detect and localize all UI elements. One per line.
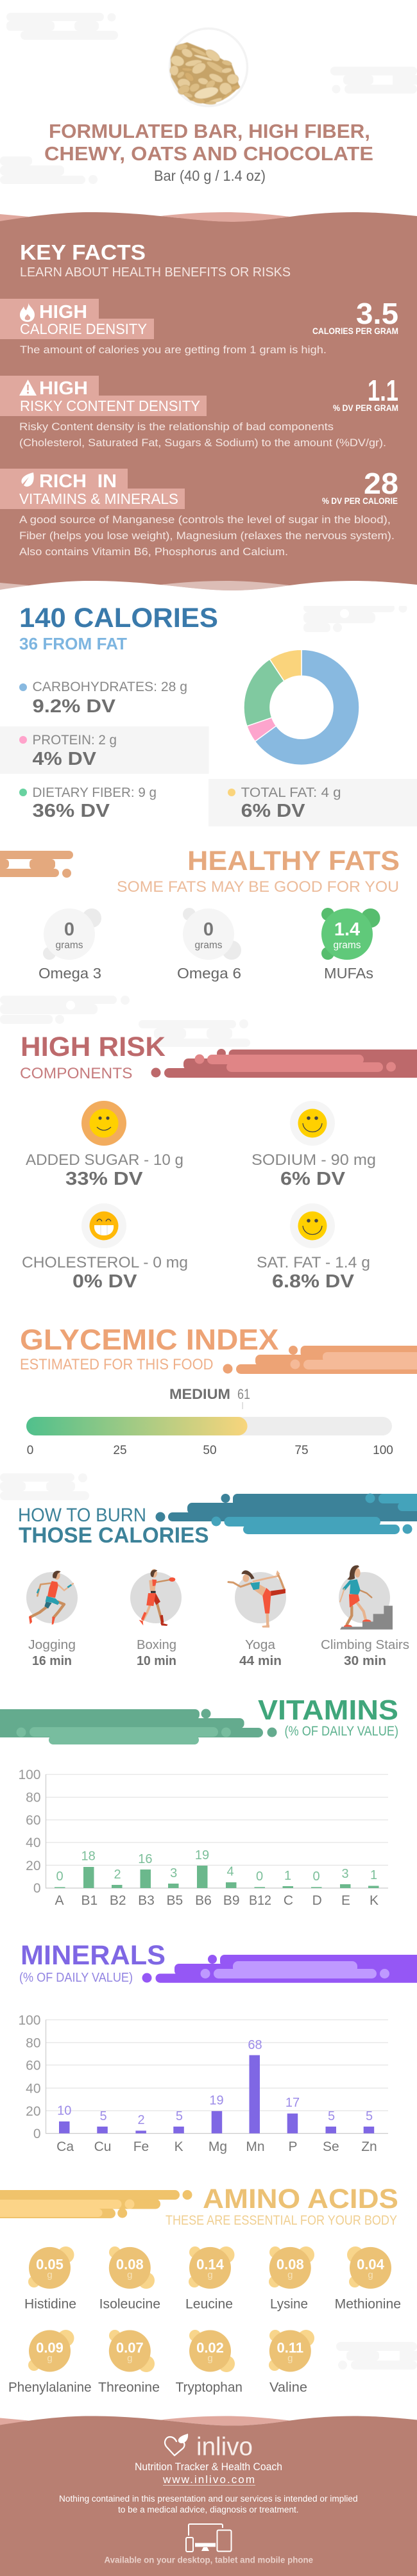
fact: rich in vitamins and minerals	[0, 467, 398, 558]
bar chart: minerals: 10	[57, 2104, 71, 2118]
activity labels: Boxing	[137, 1638, 176, 1652]
bar chart: minerals: P	[288, 2139, 298, 2154]
gauge scale: 100	[373, 1444, 393, 1457]
bar chart: vitamins: 19	[195, 1848, 209, 1862]
bar chart: vitamins: B6	[195, 1893, 212, 1908]
availability note: Available on your desktop, tablet and mobile phone	[104, 2555, 313, 2565]
bar chart: minerals: Fe	[133, 2139, 149, 2154]
bar chart: minerals: Cu	[94, 2139, 111, 2154]
bar chart: vitamins: A	[55, 1893, 64, 1908]
title: CHEWY, OATS AND CHOCOLATE	[44, 142, 373, 165]
bubble: omega 6	[177, 908, 241, 982]
gauge label: 61	[237, 1386, 250, 1402]
bar chart: vitamins: 0	[33, 1881, 41, 1896]
macro: protein: PROTEIN: 2 g	[32, 733, 117, 748]
panel: how to burn those calories	[18, 1494, 417, 1668]
bar chart: vitamins: B9	[223, 1893, 240, 1908]
amino values: 0.07	[116, 2340, 144, 2356]
amino names: Methionine	[335, 2296, 401, 2312]
amino names	[8, 2296, 401, 2395]
gauge scale	[27, 1444, 393, 1457]
activity labels: 16 min	[32, 1654, 72, 1668]
bar chart: vitamins: 18	[81, 1850, 96, 1864]
macro: dietary fiber: 36% DV	[32, 801, 110, 821]
gauge scale: 75	[294, 1444, 309, 1457]
bar chart: minerals: Ca	[56, 2139, 74, 2154]
macro: protein	[19, 733, 117, 769]
bubble: mufas	[321, 908, 380, 982]
bubble: mufas: 1.4	[334, 919, 360, 940]
fact: risky content density: (Cholesterol, Saturated Fat, Sugars & Sodium) to the amount (%DV/gr).	[19, 437, 386, 449]
amino values: 0.11	[277, 2340, 303, 2356]
macro: dietary fiber	[19, 785, 157, 821]
bar chart: minerals: Se	[323, 2139, 339, 2154]
activity labels: 44 min	[239, 1654, 282, 1668]
macro: protein: 4% DV	[32, 749, 97, 769]
panel: footer	[0, 2416, 417, 2576]
panel: high risk components	[20, 1032, 417, 1292]
bar chart: vitamins: 20	[26, 1859, 41, 1873]
fact: risky content density: 1.1	[368, 374, 398, 407]
amino units: g	[207, 2270, 213, 2280]
panel: calories	[0, 603, 417, 826]
icon: leaf	[21, 473, 34, 487]
gauge scale: 0	[27, 1444, 33, 1457]
amino values	[36, 2257, 385, 2356]
fact: rich in vitamins and minerals: A good source of Manganese (controls the level of sugar in the blood),	[19, 514, 391, 526]
subheading: ESTIMATED FOR THIS FOOD	[20, 1356, 213, 1373]
bubble: omega 3	[38, 908, 101, 982]
component: added sugar: 33% DV	[65, 1169, 143, 1189]
component: saturated fat: SAT. FAT - 1.4 g	[257, 1254, 370, 1271]
bar chart: minerals: 0	[33, 2127, 41, 2141]
heading: high risk: HIGH RISK	[21, 1032, 166, 1062]
bar chart: vitamins: 100	[18, 1768, 41, 1782]
activity: climbing stairs	[339, 1565, 393, 1630]
bar chart: vitamins: C	[284, 1893, 293, 1908]
component: added sugar: ADDED SUGAR - 10 g	[26, 1151, 183, 1169]
fact: risky content density	[0, 374, 398, 449]
fact: risky content density: % DV PER GRAM	[333, 403, 398, 413]
icon: warning triangle	[19, 380, 37, 396]
activity: boxing	[130, 1569, 182, 1626]
bar chart: minerals: Mn	[246, 2139, 265, 2154]
bubble: omega 6: grams	[194, 940, 223, 951]
fact: risky content density: Risky Content density is the relationship of bad components	[19, 421, 334, 433]
fact: rich in vitamins and minerals: RICH IN	[39, 471, 117, 492]
disclaimer: Nothing contained in this presentation and our services is intended or implied	[59, 2494, 358, 2504]
bar chart: minerals: 5	[328, 2109, 335, 2123]
heading: minerals: MINERALS	[21, 1940, 166, 1971]
bar chart: minerals: 19	[209, 2094, 224, 2108]
amino units: g	[207, 2353, 213, 2364]
bar chart: vitamins: B5	[167, 1893, 183, 1908]
subheading: LEARN ABOUT HEALTH BENEFITS OR RISKS	[20, 265, 291, 280]
heading: glycemic index: GLYCEMIC INDEX	[20, 1323, 278, 1356]
bubble: omega 6: Omega 6	[177, 965, 241, 982]
bubble: omega 6: 0	[203, 919, 214, 940]
banner shape	[0, 851, 73, 878]
bar chart: minerals: 80	[26, 2036, 41, 2050]
amino units: g	[287, 2353, 293, 2364]
fact: calorie density: The amount of calories you are getting from 1 gram is high.	[20, 344, 327, 356]
website link: www.inlivo.com	[162, 2473, 255, 2486]
bar chart: minerals: 2	[137, 2113, 145, 2127]
bar chart: vitamins: K	[370, 1893, 379, 1908]
heading: amino acids: AMINO ACIDS	[203, 2184, 398, 2214]
amino names: Leucine	[185, 2296, 233, 2312]
macro: total fat: TOTAL FAT: 4 g	[241, 785, 341, 800]
bar chart: vitamins: E	[341, 1893, 350, 1908]
fact: calorie density: CALORIES PER GRAM	[312, 326, 398, 336]
panel: minerals	[18, 1940, 417, 2154]
banner shape	[155, 1494, 417, 1534]
bar chart: minerals: 100	[18, 2013, 41, 2028]
macro: total fat: 6% DV	[241, 801, 305, 821]
bar chart: minerals: 5	[176, 2109, 183, 2123]
activity labels	[28, 1638, 409, 1668]
subheading: (% OF DAILY VALUE)	[19, 1971, 133, 1985]
fact: risky content density: RISKY CONTENT DENSITY	[20, 397, 200, 414]
component: saturated fat	[257, 1203, 370, 1292]
amino bubbles: smaller circles	[28, 2246, 364, 2372]
bubble: omega 3: grams	[55, 940, 83, 951]
bubble: mufas: MUFAs	[324, 965, 373, 982]
bar chart: minerals: 60	[26, 2058, 41, 2073]
fact: risky content density: HIGH	[39, 378, 88, 399]
disclaimer	[59, 2494, 358, 2514]
fact: calorie density: HIGH	[39, 302, 87, 322]
amino names: Tryptophan	[176, 2380, 243, 2395]
bar chart: vitamins: 40	[26, 1836, 41, 1850]
heading: those calories: THOSE CALORIES	[19, 1523, 209, 1548]
fact: rich in vitamins and minerals: % DV PER CALORIE	[322, 496, 398, 506]
amino units	[47, 2270, 373, 2364]
bar chart: minerals: 68	[248, 2038, 262, 2052]
bar chart: vitamins: B3	[138, 1893, 155, 1908]
gauge scale: 25	[113, 1444, 127, 1457]
amino units: g	[127, 2270, 132, 2280]
bar chart: vitamins: 60	[26, 1813, 41, 1828]
tagline: Nutrition Tracker & Health Coach	[135, 2461, 282, 2473]
panel: healthy fats	[0, 846, 400, 982]
amino units: g	[127, 2353, 132, 2364]
bar chart: vitamins: 0	[312, 1869, 320, 1884]
amino names: Lysine	[270, 2296, 308, 2312]
heading: vitamins: VITAMINS	[258, 1694, 398, 1726]
activity: yoga	[228, 1570, 286, 1628]
macro: carbohydrates: 9.2% DV	[32, 696, 116, 717]
amino bubbles: main circles	[29, 2247, 391, 2372]
panel: key facts	[0, 212, 417, 606]
bar chart: minerals: 40	[26, 2081, 41, 2096]
logo wordmark: inlivo	[196, 2432, 253, 2461]
gauge label: MEDIUM	[169, 1386, 230, 1402]
title	[44, 120, 373, 165]
activity labels: Yoga	[245, 1638, 276, 1652]
fact: calorie density: CALORIE DENSITY	[20, 321, 147, 337]
amino values: 0.14	[196, 2257, 225, 2272]
fact: calorie density	[0, 297, 398, 356]
activity labels: 10 min	[137, 1654, 176, 1668]
serving size: Bar (40 g / 1.4 oz)	[154, 167, 266, 184]
bar chart: vitamins: 3	[170, 1866, 177, 1880]
bar chart: minerals: Mg	[208, 2139, 227, 2154]
bar chart: vitamins: 4	[226, 1864, 234, 1878]
icon: devices	[186, 2524, 231, 2552]
bar chart: minerals: 20	[26, 2104, 41, 2119]
activity labels: Climbing Stairs	[321, 1638, 409, 1652]
bar chart: vitamins: 2	[114, 1868, 121, 1882]
bar chart: minerals: Zn	[361, 2139, 377, 2154]
heading: how to burn: HOW TO BURN	[18, 1505, 146, 1526]
donut chart	[244, 649, 359, 765]
bar chart: vitamins: 0	[56, 1869, 64, 1884]
activity labels: 30 min	[344, 1654, 386, 1668]
amino units: g	[287, 2270, 293, 2280]
title: FORMULATED BAR, HIGH FIBER,	[49, 120, 370, 142]
panel: glycemic index	[20, 1323, 417, 1457]
component: sodium: 6% DV	[280, 1169, 346, 1189]
bubble: omega 3: 0	[64, 919, 74, 940]
bar chart: vitamins: 16	[138, 1852, 153, 1866]
subheading: from fat: 36 FROM FAT	[19, 634, 127, 653]
subheading: components: COMPONENTS	[20, 1065, 132, 1082]
bar chart: minerals: 5	[99, 2109, 107, 2123]
amino names: Isoleucine	[99, 2296, 160, 2312]
bar chart: vitamins: 1	[370, 1868, 377, 1882]
bar chart: minerals: K	[174, 2139, 183, 2154]
food image: oats	[169, 28, 248, 106]
fact: calorie density: 3.5	[356, 297, 398, 330]
amino units: g	[47, 2353, 53, 2364]
amino units: g	[47, 2270, 53, 2280]
gauge scale: 50	[203, 1444, 217, 1457]
bar chart: minerals	[18, 2013, 388, 2154]
amino values: 0.09	[36, 2340, 64, 2356]
banner shape	[142, 1955, 417, 1983]
bar chart: vitamins: B2	[110, 1893, 126, 1908]
gauge bar	[26, 1417, 392, 1435]
banner shape	[0, 2190, 192, 2218]
disclaimer: to be a medical advice, diagnosis or treatment.	[118, 2505, 299, 2514]
heading: key facts: KEY FACTS	[20, 240, 146, 264]
heading: healthy fats: HEALTHY FATS	[187, 846, 400, 876]
macro: dietary fiber: DIETARY FIBER: 9 g	[32, 785, 157, 800]
subheading: SOME FATS MAY BE GOOD FOR YOU	[117, 878, 399, 896]
bubble: omega 3: Omega 3	[38, 965, 101, 982]
fact: rich in vitamins and minerals: Fiber (helps you lose weight), Magnesium (relaxes the nervous system).	[19, 530, 395, 542]
macro: carbohydrates: CARBOHYDRATES: 28 g	[32, 680, 187, 694]
component: cholesterol: 0% DV	[72, 1271, 137, 1292]
activity: jogging	[26, 1571, 78, 1625]
bar chart: vitamins: 80	[26, 1791, 41, 1805]
component: added sugar	[26, 1101, 183, 1189]
bar chart: vitamins	[18, 1768, 388, 1908]
banner shape	[151, 1049, 417, 1078]
bar chart: vitamins: B12	[249, 1893, 271, 1908]
amino names: Threonine	[98, 2380, 160, 2395]
panel: amino acids	[0, 2184, 401, 2395]
amino names: Histidine	[24, 2296, 76, 2312]
fact: rich in vitamins and minerals: Also contains Vitamin B6, Phosphorus and Calcium.	[19, 546, 288, 558]
bar chart: vitamins: 1	[284, 1869, 291, 1883]
component: cholesterol	[22, 1203, 188, 1292]
bar chart: vitamins: D	[312, 1893, 322, 1908]
banner shape	[223, 1346, 417, 1374]
bar chart: vitamins: B1	[81, 1893, 98, 1908]
amino units: g	[368, 2270, 373, 2280]
amino values: 0.04	[357, 2257, 385, 2272]
amino names: Phenylalanine	[8, 2380, 92, 2395]
activity labels: Jogging	[28, 1638, 76, 1652]
bar chart: minerals: 5	[366, 2109, 373, 2123]
bar chart: vitamins: 0	[256, 1869, 263, 1884]
component: cholesterol: CHOLESTEROL - 0 mg	[22, 1254, 188, 1271]
subheading: (% OF DAILY VALUE)	[285, 1724, 398, 1739]
logo: heart and leaf	[165, 2434, 188, 2455]
macro: total fat	[228, 785, 341, 821]
fact: rich in vitamins and minerals: 28	[364, 467, 398, 500]
macro: carbohydrates	[19, 680, 187, 717]
bubble: mufas: grams	[333, 940, 361, 951]
icon: flame	[20, 303, 35, 322]
amino values: 0.02	[196, 2340, 224, 2356]
bar chart: minerals: 17	[285, 2096, 300, 2110]
amino names: Valine	[269, 2380, 307, 2395]
amino values: 0.05	[36, 2257, 64, 2272]
panel: vitamins	[0, 1694, 398, 1908]
amino values: 0.08	[277, 2257, 304, 2272]
component: sodium: SODIUM - 90 mg	[251, 1151, 376, 1169]
banner shape	[0, 1709, 277, 1744]
heading: calories: 140 CALORIES	[19, 603, 218, 633]
bar chart: vitamins: 3	[341, 1867, 349, 1881]
amino values: 0.08	[116, 2257, 144, 2272]
component: sodium	[251, 1101, 376, 1189]
component: saturated fat: 6.8% DV	[272, 1271, 355, 1292]
fact: rich in vitamins and minerals: VITAMINS & MINERALS	[19, 490, 178, 507]
